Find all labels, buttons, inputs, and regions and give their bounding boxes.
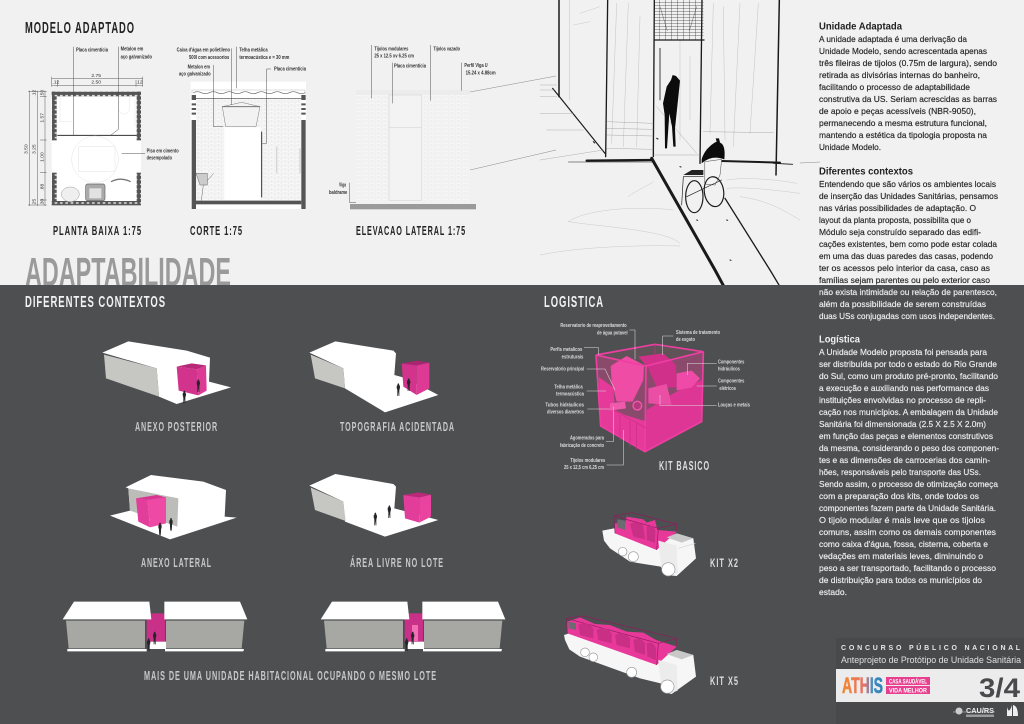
diagram: kit basico with callouts: termoacústica xyxy=(556,392,584,398)
diagram: kit basico with callouts: diversos diametros xyxy=(547,410,584,416)
drawing: elevacao lateral: Tijolos vazado xyxy=(433,46,461,52)
drawing: corte xyxy=(177,47,306,209)
caption: kit basico: KIT BASICO xyxy=(659,458,710,473)
text: concurso publico nacional: C O N C U R S O P Ú B L I C O N A C I O N A L xyxy=(841,643,1021,652)
diagram: kit basico with callouts xyxy=(541,323,750,471)
caption: kit x2: KIT X2 xyxy=(710,556,739,570)
diagram: kit basico with callouts: estruturais xyxy=(562,354,583,360)
drawing: corte: Caixa d'água em polietileno xyxy=(177,48,231,54)
drawing: planta baixa: aço galvanizado xyxy=(121,54,153,60)
caption: planta baixa: PLANTA BAIXA 1:75 xyxy=(53,223,142,238)
text block: unidade adaptada: construtiva da US. Seriam acrescidas as barras xyxy=(819,94,997,104)
drawing: elevacao lateral: Placa cimentícia xyxy=(394,63,426,69)
drawing: elevacao lateral: Viga xyxy=(339,183,346,189)
text block: unidade adaptada: de apoio e peças acessíveis (NBR-9050), xyxy=(819,106,976,116)
text block: logistica: ser distribuída por todo o estado do Rio Grande xyxy=(819,359,997,369)
text block: logistica xyxy=(819,334,999,597)
diagram: kit basico with callouts: Perfis metalicos xyxy=(550,347,582,353)
diagram: truck kit x5 xyxy=(564,616,696,694)
logo: casa saudavel vida melhor: CASA SAUDÁVEL xyxy=(889,676,927,686)
diagram: kit basico with callouts: Telha metálica xyxy=(554,385,583,391)
text block: logistica: da mesma, considerando o peso dos componen- xyxy=(819,443,999,453)
text block: logistica: O tijolo modular é mais leve que os tijolos xyxy=(819,515,985,525)
caption: anexo posterior: ANEXO POSTERIOR xyxy=(135,420,218,434)
diagram: anexo posterior xyxy=(102,341,231,404)
diagram: area livre no lote xyxy=(309,474,438,537)
diagram: kit basico with callouts: elétricos xyxy=(719,386,736,392)
drawing: planta baixa: .50 xyxy=(39,90,45,97)
sketch: person and wheelchair user entering the unit xyxy=(540,0,800,287)
text block: logistica: a execução e auxiliando nas performance das xyxy=(819,383,989,393)
text block: unidade adaptada: facilitando o processo de adaptabilidade xyxy=(819,82,970,92)
diagram: kit basico with callouts: Sistema de tratamento xyxy=(676,330,721,336)
text block: logistica: como caixa d'água, fossa, cisterna, coberta e xyxy=(819,539,988,549)
text block: logistica: instituições envolvidas no processo de repli- xyxy=(819,395,986,405)
caption: anexo lateral: ANEXO LATERAL xyxy=(141,556,212,570)
logo: cau rs xyxy=(953,706,995,717)
text block: diferentes contextos: de inserção das Unidades Sanitárias, pensamos xyxy=(819,191,998,201)
drawing: elevacao lateral: 25 x 12.5 xv 6.25 cm xyxy=(374,53,414,59)
drawing: planta baixa: Placa cimentícia xyxy=(76,48,108,54)
text block: diferentes contextos: em uma das duas paredes das casas, podendo xyxy=(819,251,993,261)
drawing: planta baixa: 1.00 xyxy=(39,152,45,162)
drawing: planta baixa: Metalon em xyxy=(121,47,144,53)
text block: logistica: hões, responsáveis pelo transporte das USs. xyxy=(819,467,981,477)
text block: logistica: com a preparação dos kits, onde todos os xyxy=(819,491,979,501)
drawing: elevacao lateral: baldrame xyxy=(329,190,347,196)
diagram: kit basico with callouts: Componentes xyxy=(718,379,744,385)
heading: diferentes contextos: DIFERENTES CONTEXTOS xyxy=(25,294,166,311)
drawing: corte: Metalon em xyxy=(188,65,210,71)
panel: dark lower band xyxy=(0,285,1024,724)
title: adaptabilidade: ADAPTABILIDADE xyxy=(25,249,231,295)
diagram: kit basico with callouts: Reservatorio principal xyxy=(541,367,584,373)
drawing: planta baixa xyxy=(24,47,179,206)
diagram: kit basico with callouts: 25 x 12,5 cm 6,25 cm xyxy=(564,465,604,471)
diagram: kit basico with callouts: fabricação de concreto xyxy=(560,443,605,449)
caption: topografia acidentada: TOPOGRAFIA ACIDENTADA xyxy=(340,420,455,434)
text block: logistica: Logística xyxy=(819,334,860,346)
text block: logistica: de distribuição para todos os municípios do xyxy=(819,575,982,585)
panel: title block xyxy=(836,638,1024,724)
text block: logistica: vedações em materiais leves, diminuindo o xyxy=(819,551,983,561)
diagram: kit basico with callouts: Agomerados para xyxy=(570,436,604,442)
logo: cau rs: CAU/RS xyxy=(966,706,994,715)
text block: logistica: tes e as dimensões de carrocerias dos camin- xyxy=(819,455,990,465)
drawing: elevacao lateral xyxy=(329,45,496,209)
diagram: duas unidades com acesso externo xyxy=(63,602,247,651)
diagram: anexo lateral xyxy=(110,475,237,539)
text block: unidade adaptada: Unidade Modelo, sendo acrescentada apenas xyxy=(819,46,987,56)
diagram: kit basico with callouts: Tubos hidráulicos xyxy=(545,402,584,408)
text block: logistica: A Unidade Modelo proposta foi pensada para xyxy=(819,347,987,357)
page number: 3/4 xyxy=(979,673,1020,703)
diagram: kit basico with callouts: de esgoto xyxy=(676,337,696,343)
text block: diferentes contextos: Entendendo que são vários os ambientes locais xyxy=(819,179,996,189)
drawing: planta baixa: 3.50 xyxy=(24,144,30,154)
drawing: planta baixa: 2.75 xyxy=(91,73,101,79)
drawing: planta baixa: 3.25 xyxy=(32,144,38,154)
text block: logistica: comuns, assim como os demais componentes xyxy=(819,527,996,537)
text block: unidade adaptada: três fileiras de tijolos (0.75m de largura), sendo xyxy=(819,58,997,68)
text block: diferentes contextos: famílias sejam parentes ou pelo exterior caso xyxy=(819,275,990,285)
logo: athis: ATHIS xyxy=(842,673,883,698)
drawing: planta baixa: .30 xyxy=(39,199,45,206)
caption: elevacao lateral: ELEVACAO LATERAL 1:75 xyxy=(356,223,466,238)
drawing: elevacao lateral: 15.24 x 4.88cm xyxy=(466,70,496,76)
text block: diferentes contextos xyxy=(819,166,998,321)
diagram: kit basico with callouts: Louças e metais xyxy=(718,402,750,408)
text block: diferentes contextos: além da possibilidade de serem construídas xyxy=(819,299,986,309)
text block: logistica: componentes fazem parte da Unidade Sanitária. xyxy=(819,503,996,513)
title: modelo adaptado: MODELO ADAPTADO xyxy=(25,20,135,37)
text block: diferentes contextos: nas várias possibilidades de adaptação. O xyxy=(819,203,976,213)
text block: diferentes contextos: duas USs conjugadas com usos independentes. xyxy=(819,311,995,321)
drawing: planta baixa: .12 xyxy=(32,90,38,97)
text block: logistica: do Sul, como um produto pré-pronto, facilitando xyxy=(819,371,998,381)
caption: mais de uma unidade: MAIS DE UMA UNIDADE HABITACIONAL OCUPANDO O MESMO LOTE xyxy=(144,669,437,683)
text block: unidade adaptada: Unidade Adaptada xyxy=(819,22,902,32)
drawing: elevacao lateral: Perfil Viga U xyxy=(464,63,488,69)
diagram: duas unidades com acesso interno xyxy=(321,602,505,651)
text block: diferentes contextos: Módulo seja construído separado das edifi- xyxy=(819,227,981,237)
diagram: kit basico with callouts: Reservatorio de reaproveitamento xyxy=(560,323,627,329)
text block: unidade adaptada: Unidade Modelo. xyxy=(819,142,881,152)
text block: unidade adaptada: permanecendo a mesma estrutura funcional, xyxy=(819,118,987,128)
diagram: truck kit x2 xyxy=(602,513,696,576)
drawing: corte: 500l com acessorios xyxy=(189,55,229,61)
drawing: planta baixa: 1.57 xyxy=(39,113,45,123)
text block: unidade adaptada xyxy=(819,22,997,152)
text block: unidade adaptada: A unidade adaptada é uma derivação da xyxy=(819,34,967,44)
diagram: kit basico with callouts: de água potavel xyxy=(597,330,628,336)
sketch: faint perspective lines xyxy=(470,76,820,170)
drawing: planta baixa: .25 xyxy=(32,199,38,206)
drawing: planta baixa: Piso em cimento xyxy=(147,148,179,154)
text block: logistica: em função das peças e elementos construtivos xyxy=(819,431,993,441)
text block: unidade adaptada: retirada as divisórias internas do banheiro, xyxy=(819,70,980,80)
heading: logistica: LOGISTICA xyxy=(544,294,604,311)
diagram: kit basico with callouts: hidráulicos xyxy=(718,367,740,373)
text block: diferentes contextos: ter os acessos pelo interior da casa, caso as xyxy=(819,263,990,273)
text block: logistica: Sendo assim, o processo de otimização começa xyxy=(819,479,998,489)
drawing: corte: Placa cimentícia xyxy=(274,67,306,73)
logo: casa saudavel vida melhor xyxy=(886,676,930,694)
diagram: topografia acidentada xyxy=(309,341,438,412)
text block: diferentes contextos: não exista intimidade ou relação de parentesco, xyxy=(819,287,997,297)
caption: area livre no lote: ÁREA LIVRE NO LOTE xyxy=(350,555,444,570)
text block: logistica: estado. xyxy=(819,587,847,597)
logo: casa saudavel vida melhor: VIDA MELHOR xyxy=(889,688,927,694)
drawing: corte: termoacústica e = 30 mm xyxy=(239,55,290,61)
text block: diferentes contextos: Diferentes contextos xyxy=(819,166,913,178)
drawing: elevacao lateral: Tijolos modulares xyxy=(374,46,408,52)
drawing: planta baixa: .88 xyxy=(39,184,45,191)
text block: diferentes contextos: cações existentes, bem como pode estar colada xyxy=(819,239,997,249)
drawing: planta baixa: .12 xyxy=(136,80,143,86)
text block: unidade adaptada: mantendo a estética da tipologia proposta na xyxy=(819,130,987,140)
drawing: corte: Telha metálica xyxy=(239,48,268,54)
drawing: corte: aço galvanizado xyxy=(179,72,211,78)
drawing: planta baixa: .12 xyxy=(52,80,59,86)
diagram: kit basico with callouts: Tijolos modulares xyxy=(570,458,605,464)
text block: diferentes contextos: layout da planta proposta, possibilita que o xyxy=(819,215,971,225)
text block: logistica: peso a ser transportado, facilitando o processo xyxy=(819,563,996,573)
caption: corte: CORTE 1:75 xyxy=(190,223,243,238)
drawing: planta baixa: 2.50 xyxy=(91,80,101,86)
caption: kit x5: KIT X5 xyxy=(710,674,739,688)
logo: institutional mark xyxy=(1007,705,1018,716)
text block: logistica: cação nos municípios. A embalagem da Unidade xyxy=(819,407,998,417)
diagram: kit basico with callouts: Componentes xyxy=(718,359,744,365)
drawing: planta baixa: desempolado xyxy=(147,156,173,162)
text block: logistica: Sanitária foi dimensionada (2.5 X 2.5 X 2.0m) xyxy=(819,419,986,429)
